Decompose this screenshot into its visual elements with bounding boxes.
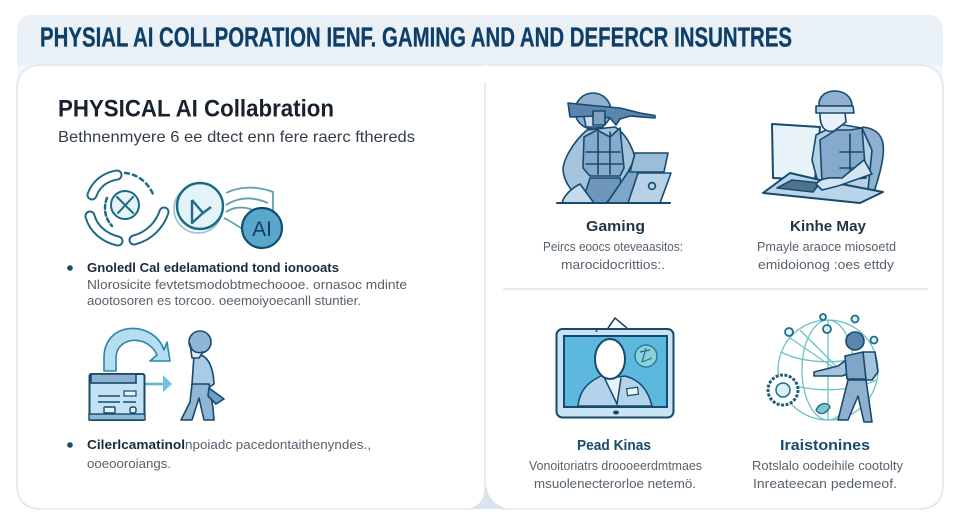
- icon: AI badge: [242, 208, 282, 248]
- Pead Kinas description: msuolenecterorloe netemö.: [534, 477, 696, 491]
- heading: Iraistonines: Iraistonines: [780, 437, 870, 454]
- heading: Kinhe May: Kinhe May: [790, 218, 867, 235]
- Gaming description: marocidocrittios:.: [561, 258, 665, 272]
- bullet one text: Nlorosicite fevtetsmodobtmechoooe. ornasoc mdinte: [87, 278, 407, 292]
- heading: Gaming: Gaming: [586, 218, 645, 235]
- panel: right use cases: [470, 65, 943, 509]
- Kinhe May description: [757, 240, 896, 272]
- bullet two text: [67, 438, 371, 471]
- Pead Kinas description: [529, 459, 702, 491]
- Pead Kinas description: Vonoitoriatrs droooeerdmtmaes: [529, 459, 702, 473]
- heading: Pead Kinas: Pead Kinas: [577, 437, 651, 454]
- Gaming description: [543, 240, 683, 272]
- Iraistonines description: Rotslalo oodeihile cootolty: [752, 459, 904, 473]
- left subtitle: Bethnenmyere 6 ee dtect enn fere raerc fthereds: [58, 129, 415, 146]
- header band with title: [17, 15, 943, 90]
- bullet two text: Cilerlcamatinol: [87, 438, 185, 452]
- bullet two text: npoiadc pacedontaithenyndes.,: [185, 438, 371, 452]
- Kinhe May description: emidoionog :oes ettdy: [758, 258, 895, 272]
- icon: gaming soldier with rifle and laptop: [557, 93, 671, 203]
- icon: soldier at laptop: [763, 91, 883, 203]
- bullet two text: ooeooroiangs.: [87, 457, 171, 471]
- left heading: PHYSICAL AI Collabration: [58, 96, 334, 122]
- Gaming description: Peircs eoocs oteveaasitos:: [543, 240, 683, 254]
- icon: waves and play circle: [174, 183, 273, 233]
- bullet one text: Gnoledl Cal edelamationd tond ionooats: [87, 261, 339, 275]
- bullet one text: aootosoren es torcoo. oeemoiyoecanll stuntier.: [87, 294, 361, 308]
- icon: gear with circular arrows: [90, 173, 164, 241]
- icon: AI badge: AI: [252, 218, 272, 241]
- Iraistonines description: [752, 459, 904, 491]
- icon: soldier with globe network: [768, 314, 878, 422]
- icon: document box with curved arrow: [89, 328, 172, 420]
- Iraistonines description: Inreateecan pedemeof.: [753, 477, 897, 491]
- panel: left collaboration: [17, 65, 485, 509]
- icon: tablet with presenter: [556, 318, 674, 418]
- icon: walking soldier: [181, 331, 224, 420]
- Kinhe May description: Pmayle araoce miosoetd: [757, 240, 896, 254]
- bullet one text: [67, 261, 407, 308]
